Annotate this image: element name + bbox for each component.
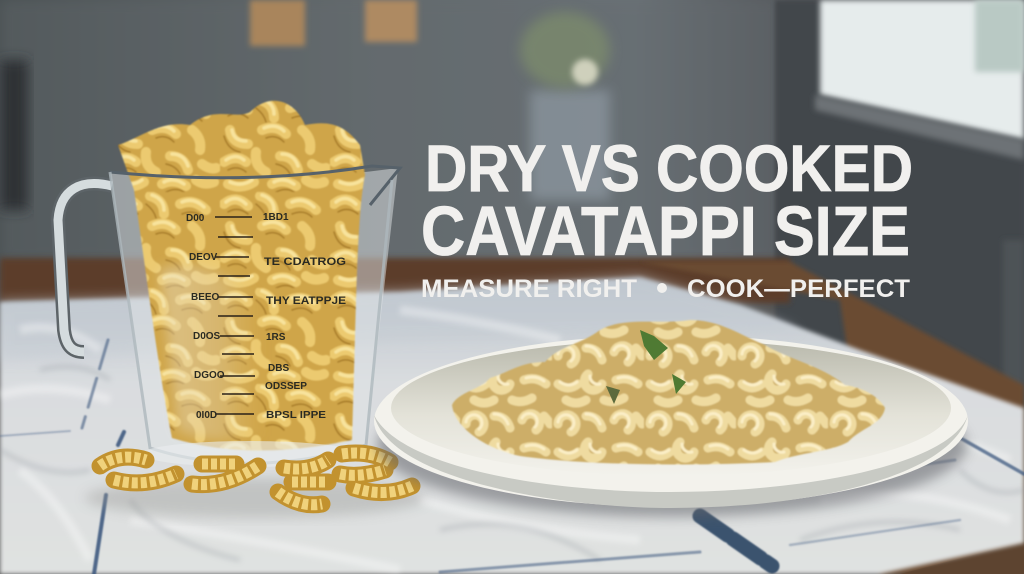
cooked pasta mound	[452, 320, 885, 464]
measurement markings	[186, 212, 346, 421]
title: CAVATAPPI SIZE	[421, 192, 910, 270]
measurement markings: BPSL IPPE	[266, 410, 326, 421]
white plate	[374, 335, 968, 507]
measurement markings: ODSSEP	[265, 381, 307, 392]
measurement markings: DBS	[268, 363, 289, 374]
wooden table	[0, 258, 1024, 574]
loose dry cavatappi on cloth	[85, 453, 425, 518]
subtitle	[421, 275, 910, 303]
title	[421, 131, 913, 270]
measurement markings: D00	[186, 213, 205, 224]
measurement markings: DGOO	[194, 370, 225, 381]
background: window at top right	[775, 0, 1024, 420]
measurement markings: THY EATPPJE	[266, 295, 346, 307]
cup rim	[110, 166, 400, 205]
glass body	[110, 168, 398, 463]
measurement markings: TE CDATROG	[264, 256, 346, 268]
title: DRY VS COOKED	[425, 131, 913, 205]
measurement markings: D0OS	[193, 331, 221, 342]
measurement markings: 1RS	[266, 332, 286, 343]
measurement markings: 1BD1	[263, 212, 289, 223]
parsley garnish	[606, 330, 686, 404]
tablecloth with blue stripes	[0, 275, 1024, 574]
measurement markings: DEOV	[189, 252, 218, 263]
glass measuring cup	[58, 101, 400, 467]
measurement markings: BEEO	[191, 292, 220, 303]
subtitle: COOK—PERFECT	[687, 275, 910, 303]
plate of cooked cavatappi	[374, 320, 968, 517]
subtitle: MEASURE RIGHT	[421, 275, 637, 303]
measurement markings: 0I0D	[196, 410, 217, 421]
icon: cup handle	[58, 184, 112, 352]
background: blurred kitchen wall	[0, 0, 1024, 280]
dry pasta mound inside cup	[118, 101, 365, 451]
